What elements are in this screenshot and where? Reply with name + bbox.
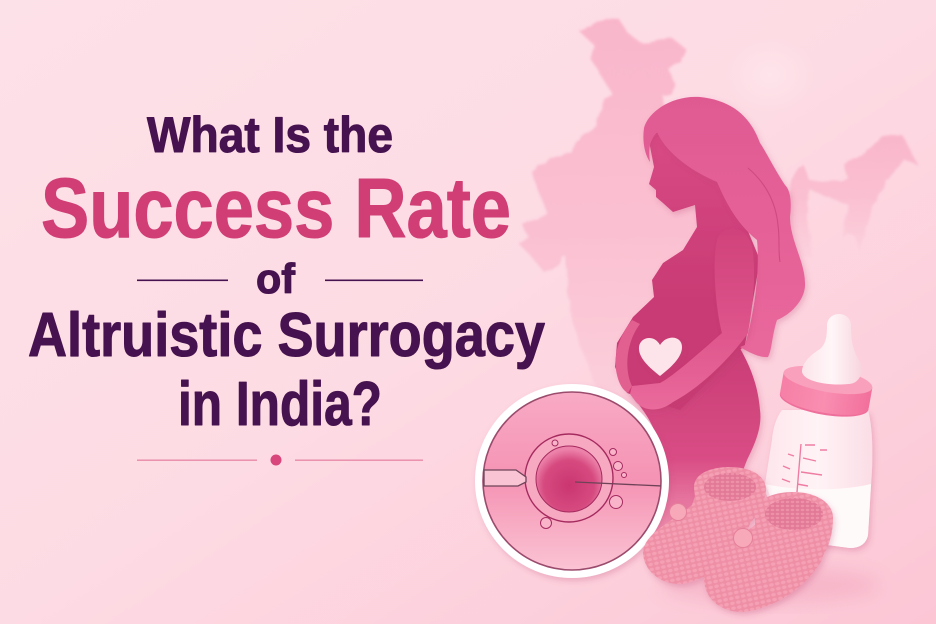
title line: What Is the: What Is the xyxy=(147,107,393,163)
arm cradling belly xyxy=(630,229,754,410)
title line: Altruistic Surrogacy: Altruistic Surrogacy xyxy=(28,301,545,370)
dish interior xyxy=(483,392,661,570)
torso and face xyxy=(615,132,760,410)
long hair xyxy=(643,97,805,357)
divider left of "of" xyxy=(137,280,228,281)
knitted baby booties xyxy=(643,467,833,612)
nipple xyxy=(802,314,862,384)
collar top xyxy=(782,360,874,400)
dish white rim xyxy=(475,384,669,578)
milk xyxy=(765,484,871,548)
baby bottle xyxy=(764,314,874,548)
title word: of: of xyxy=(256,255,296,302)
right bootie foot xyxy=(704,510,832,612)
left bootie xyxy=(643,467,766,584)
map of India watercolor silhouette xyxy=(520,19,918,440)
bottle collar xyxy=(778,360,874,422)
lower body xyxy=(632,330,760,545)
collar band xyxy=(778,372,872,420)
measurement marks scale xyxy=(782,444,827,492)
right bootie xyxy=(704,492,833,612)
icon: heart on belly xyxy=(639,338,682,376)
floor shadow behind props xyxy=(660,567,880,603)
left bootie opening xyxy=(704,473,756,501)
bottle body xyxy=(764,410,872,548)
injection needle xyxy=(575,482,662,486)
belly lighter edge xyxy=(616,320,640,393)
bottom ornament divider with dot xyxy=(137,454,423,466)
left bootie button xyxy=(670,504,686,520)
left bootie foot xyxy=(643,490,766,584)
pregnant woman paper-cut silhouette xyxy=(615,97,880,603)
right bootie cuff xyxy=(754,492,833,561)
microscope dish with egg cell xyxy=(475,384,669,578)
background glow xyxy=(725,37,815,113)
cell bubbles xyxy=(540,440,626,528)
title line: Success Rate: Success Rate xyxy=(41,161,511,255)
hair strand detail xyxy=(748,168,780,262)
egg cell xyxy=(484,434,662,528)
right bootie button xyxy=(734,528,752,548)
left bootie cuff xyxy=(694,467,766,531)
title xyxy=(28,107,545,439)
collar lower lip xyxy=(778,381,871,422)
divider right of "of" xyxy=(325,280,423,281)
title line: in India?: in India? xyxy=(178,370,382,439)
right bootie opening xyxy=(765,498,823,530)
holding pipette xyxy=(484,470,526,486)
